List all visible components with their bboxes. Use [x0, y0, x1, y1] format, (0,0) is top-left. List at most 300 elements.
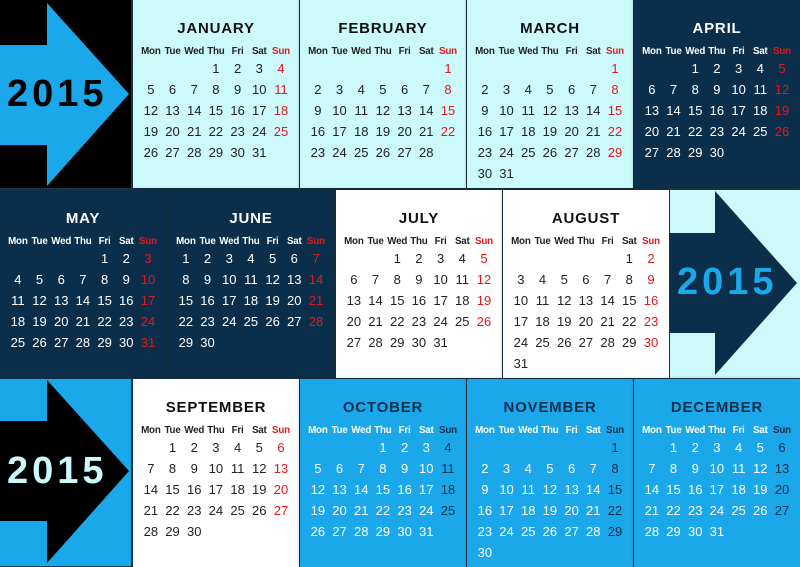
panel: january: 18 [274, 103, 288, 118]
panel: june: 28 [309, 314, 323, 329]
panel: august: 10 [514, 293, 528, 308]
panel: january: 27 [165, 145, 180, 160]
panel: december: 13 [775, 461, 789, 476]
panel: october: 3 [423, 440, 430, 455]
arrow block bottom-left [0, 379, 131, 566]
panel: august: 1 [626, 251, 633, 266]
panel: october: 4 [444, 440, 452, 455]
panel: september: 3 [212, 440, 220, 455]
panel: february: 22 [441, 124, 455, 139]
panel: april: Sun [773, 46, 791, 56]
panel: march: Sat [586, 46, 601, 56]
panel: april: 23 [710, 124, 724, 139]
panel: may: Sun [139, 236, 157, 246]
panel: november: Sun [606, 424, 624, 436]
panel: july: 23 [412, 314, 426, 329]
panel: february: 4 [358, 82, 365, 97]
panel: january: 17 [252, 103, 267, 118]
panel: december: Tue [665, 424, 682, 436]
panel: january: Thu [207, 46, 225, 56]
panel: may: Fri [99, 236, 111, 246]
panel: november: NOVEMBER [503, 399, 597, 416]
panel: december: 12 [753, 461, 768, 476]
panel: november: 9 [481, 482, 488, 497]
panel: august: 5 [561, 272, 568, 287]
panel: july: 3 [437, 251, 444, 266]
panel: november: 13 [564, 482, 579, 497]
panel: november: 16 [478, 503, 492, 518]
panel: may: 10 [141, 272, 155, 287]
panel: december: 26 [753, 503, 768, 518]
panel: april: 13 [645, 103, 659, 118]
panel: september: 21 [144, 503, 158, 518]
panel: august: 23 [644, 314, 658, 329]
panel: april: 22 [688, 124, 702, 139]
panel: june: JUNE [229, 210, 273, 227]
panel: february: 21 [419, 124, 434, 139]
panel: march: 29 [608, 145, 622, 160]
panel: may: 30 [119, 335, 134, 350]
panel: october: 14 [354, 482, 368, 497]
panel: december: 11 [732, 461, 745, 476]
panel: march: 2 [481, 82, 488, 97]
panel: june: Sun [307, 236, 325, 246]
panel: april: Thu [708, 46, 726, 56]
panel: september: 12 [252, 461, 267, 476]
panel: march: 17 [499, 124, 514, 139]
panel: november: 6 [568, 461, 575, 476]
panel: september: 1 [169, 440, 176, 455]
panel: august: 7 [604, 272, 611, 287]
panel: january: Wed [184, 46, 204, 56]
panel: january: 5 [147, 82, 154, 97]
panel: january: 25 [274, 124, 288, 139]
panel: october: 11 [441, 461, 455, 476]
panel: june: 5 [269, 251, 276, 266]
panel: march: Mon [475, 46, 495, 56]
panel: march: 12 [543, 103, 557, 118]
panel: january: Sun [272, 46, 290, 56]
panel: december: Fri [733, 424, 745, 436]
panel: march: 23 [478, 145, 492, 160]
panel: october: 1 [379, 440, 387, 455]
panel: august: 4 [539, 272, 546, 287]
panel: july: 28 [368, 335, 383, 350]
panel: october: 9 [401, 461, 408, 476]
panel: september: 26 [252, 503, 267, 518]
panel: november: 11 [521, 482, 535, 497]
panel: june: 11 [244, 272, 258, 287]
panel: july: 13 [347, 293, 361, 308]
panel: may: 12 [32, 293, 47, 308]
panel: june: 15 [179, 293, 193, 308]
panel: april: 11 [754, 82, 767, 97]
panel: june: Sat [287, 236, 302, 246]
panel: february: 8 [444, 82, 452, 97]
panel: june [168, 190, 334, 378]
panel: december: Thu [708, 424, 726, 436]
panel: august: 14 [600, 293, 615, 308]
panel: august: 19 [557, 314, 571, 329]
panel: april: 27 [645, 145, 659, 160]
panel: march: Wed [518, 46, 538, 56]
panel: august: 29 [622, 335, 637, 350]
panel: june: Tue [199, 236, 216, 246]
panel: december: 18 [731, 482, 746, 497]
panel: january: 4 [277, 61, 285, 76]
panel: february: 25 [354, 145, 368, 160]
panel: october: Tue [331, 424, 348, 436]
panel: december: Wed [685, 424, 705, 436]
year label: 2015 [677, 261, 778, 303]
panel: december: 6 [778, 440, 786, 455]
panel: september: 28 [144, 524, 158, 539]
panel: march: 16 [478, 124, 492, 139]
panel: august: 6 [582, 272, 590, 287]
panel: february: Sun [439, 46, 457, 56]
panel: february: 28 [419, 145, 434, 160]
panel: january: 20 [165, 124, 180, 139]
panel: february: Sat [419, 46, 434, 56]
panel: july: Sun [475, 236, 493, 246]
panel: january: JANUARY [177, 20, 255, 37]
panel: may: Thu [74, 236, 92, 246]
panel: june: Mon [176, 236, 196, 246]
panel: may: 20 [54, 314, 68, 329]
panel: september: 29 [165, 524, 180, 539]
panel: october: 10 [419, 461, 434, 476]
panel: january: Fri [232, 46, 244, 56]
panel: february: Fri [399, 46, 411, 56]
panel: february: 1 [444, 61, 452, 76]
panel: september: 22 [165, 503, 180, 518]
panel: march: 13 [564, 103, 579, 118]
panel: january: 30 [230, 145, 245, 160]
panel: march: 18 [521, 124, 535, 139]
panel: july: 24 [433, 314, 448, 329]
panel: october: 18 [441, 482, 455, 497]
panel: september: 6 [277, 440, 285, 455]
panel: december: Sat [753, 424, 768, 436]
panel: august: 12 [557, 293, 571, 308]
panel: june: 4 [247, 251, 255, 266]
panel: july: 17 [433, 293, 448, 308]
panel: july: 12 [477, 272, 491, 287]
panel: july: 25 [455, 314, 470, 329]
panel: june: 8 [182, 272, 189, 287]
panel: january: 15 [209, 103, 223, 118]
panel: february: 14 [419, 103, 434, 118]
panel: december: 17 [710, 482, 724, 497]
panel: may: 18 [11, 314, 25, 329]
panel: october: 15 [376, 482, 390, 497]
panel: march: 27 [564, 145, 579, 160]
panel: april: 19 [775, 103, 789, 118]
panel: may: 14 [76, 293, 90, 308]
panel: january: 13 [165, 103, 180, 118]
panel: july: 2 [415, 251, 423, 266]
panel: december [634, 379, 800, 567]
panel: may: 1 [101, 251, 108, 266]
panel: august: 8 [626, 272, 633, 287]
panel: december: 23 [688, 503, 702, 518]
panel: january: 16 [230, 103, 245, 118]
panel: august: AUGUST [552, 210, 620, 227]
panel: november: 1 [611, 440, 619, 455]
panel: december: 27 [775, 503, 789, 518]
panel: may: 26 [32, 335, 47, 350]
panel: august: Sun [642, 236, 660, 246]
panel: august: 27 [579, 335, 593, 350]
panel: november: Tue [498, 424, 515, 436]
panel: march: 30 [478, 166, 492, 181]
panel: september: 20 [274, 482, 288, 497]
panel: september: 19 [252, 482, 267, 497]
panel: november: 26 [543, 524, 557, 539]
panel: december: 31 [710, 524, 724, 539]
panel: july: 20 [347, 314, 361, 329]
panel: october: Fri [399, 424, 411, 436]
panel: april: 18 [753, 103, 768, 118]
panel: november: 21 [586, 503, 601, 518]
panel: march: 6 [568, 82, 575, 97]
panel: october: 26 [311, 524, 325, 539]
panel: february: 2 [314, 82, 321, 97]
panel: august: Mon [511, 236, 531, 246]
panel: may: 21 [76, 314, 90, 329]
panel: november: 7 [590, 461, 597, 476]
panel: june: 25 [244, 314, 258, 329]
panel: april: 21 [666, 124, 681, 139]
panel: november: 3 [503, 461, 510, 476]
panel: december: 16 [688, 482, 702, 497]
panel: february: 17 [332, 124, 347, 139]
panel: october: 24 [419, 503, 434, 518]
panel: september [133, 379, 299, 567]
panel: may: MAY [66, 210, 100, 227]
panel: april: 16 [710, 103, 724, 118]
panel: june: Thu [242, 236, 260, 246]
panel: july: 22 [390, 314, 404, 329]
panel: september: Sun [272, 424, 290, 436]
panel: august: 24 [514, 335, 528, 350]
panel: january: Sat [252, 46, 267, 56]
panel: december: 2 [692, 440, 699, 455]
panel: november: 25 [521, 524, 535, 539]
panel: january: 12 [144, 103, 158, 118]
panel: april: 25 [753, 124, 768, 139]
panel: january: 19 [144, 124, 158, 139]
panel: july: 4 [459, 251, 466, 266]
panel: march: 24 [499, 145, 514, 160]
panel: november: 5 [546, 461, 554, 476]
panel: december: 1 [670, 440, 677, 455]
panel: july: 21 [368, 314, 383, 329]
panel: february: Wed [351, 46, 371, 56]
panel: september: 9 [191, 461, 198, 476]
panel: october: 13 [332, 482, 347, 497]
panel: may: 15 [97, 293, 112, 308]
panel: october: 5 [314, 461, 321, 476]
panel: july: 6 [350, 272, 357, 287]
panel: february: 10 [332, 103, 347, 118]
panel: july: 1 [394, 251, 401, 266]
panel: october: 31 [419, 524, 434, 539]
panel: august: 11 [536, 293, 549, 308]
panel: november: Mon [475, 424, 495, 436]
panel: october: 2 [401, 440, 408, 455]
panel: october [300, 379, 466, 567]
panel: august: 13 [579, 293, 593, 308]
panel: january: 2 [234, 61, 241, 76]
panel: march [467, 0, 633, 188]
panel: october: 8 [379, 461, 387, 476]
panel: april: 3 [735, 61, 742, 76]
panel: november: 29 [608, 524, 622, 539]
panel: october: Sat [419, 424, 434, 436]
panel: april: 4 [757, 61, 764, 76]
panel: march: 26 [543, 145, 557, 160]
panel: december: 8 [670, 461, 677, 476]
panel: july: 8 [394, 272, 401, 287]
panel: september: 4 [234, 440, 241, 455]
panel: july: 31 [433, 335, 448, 350]
panel: may: 8 [101, 272, 108, 287]
panel: october: 17 [419, 482, 434, 497]
panel: august [503, 190, 669, 378]
panel: march: 15 [608, 103, 622, 118]
panel: november: 17 [499, 503, 514, 518]
panel: february: 6 [401, 82, 408, 97]
panel: october: Thu [374, 424, 392, 436]
panel: july: 15 [390, 293, 404, 308]
panel: february: 26 [376, 145, 390, 160]
panel: august: 17 [514, 314, 528, 329]
panel: february: 13 [397, 103, 412, 118]
panel: february: 7 [423, 82, 430, 97]
panel: december: 30 [688, 524, 702, 539]
panel: september: 18 [230, 482, 245, 497]
panel: march: Thu [541, 46, 559, 56]
icon: blue arrow [0, 3, 129, 186]
panel: may: 7 [79, 272, 87, 287]
panel: august: 20 [579, 314, 593, 329]
panel: january: 21 [187, 124, 201, 139]
panel: march: 14 [586, 103, 601, 118]
panel: june: 20 [287, 293, 302, 308]
panel: february: 5 [379, 82, 387, 97]
panel: october: 6 [336, 461, 343, 476]
icon: black arrow [0, 380, 129, 563]
panel: april: 24 [731, 124, 746, 139]
panel: may [0, 190, 166, 378]
panel: august: Sat [622, 236, 637, 246]
panel: june: 19 [265, 293, 280, 308]
panel: august: 15 [622, 293, 637, 308]
panel: september: Sat [252, 424, 267, 436]
panel: may: Wed [51, 236, 71, 246]
panel: december: 7 [648, 461, 655, 476]
panel: january: 22 [209, 124, 223, 139]
panel: january: 28 [187, 145, 201, 160]
panel: march: 4 [525, 82, 532, 97]
panel: august: 2 [647, 251, 655, 266]
panel: march: 28 [586, 145, 601, 160]
panel: july: Wed [387, 236, 407, 246]
panel: january: 10 [252, 82, 267, 97]
panel: may: 25 [11, 335, 25, 350]
panel: september: 11 [231, 461, 244, 476]
panel: july: 16 [412, 293, 426, 308]
panel: september: 5 [256, 440, 263, 455]
panel: july: 30 [412, 335, 426, 350]
panel: august: 18 [535, 314, 550, 329]
panel: january: 26 [144, 145, 158, 160]
panel: october: 22 [376, 503, 390, 518]
panel: july: 14 [368, 293, 383, 308]
panel: june: 12 [265, 272, 280, 287]
panel: march: 19 [543, 124, 557, 139]
panel: january: 7 [191, 82, 198, 97]
panel: december: 3 [713, 440, 721, 455]
panel: april: 30 [710, 145, 724, 160]
panel: june: Fri [267, 236, 279, 246]
panel: april: 9 [713, 82, 721, 97]
panel: june: 6 [291, 251, 298, 266]
panel: june: 13 [287, 272, 302, 287]
panel: may: 2 [123, 251, 130, 266]
panel: february: 24 [332, 145, 347, 160]
panel: october: Wed [351, 424, 371, 436]
panel: may: 24 [141, 314, 155, 329]
panel: march: 1 [611, 61, 619, 76]
panel: january: 1 [212, 61, 220, 76]
panel: july: Sat [455, 236, 470, 246]
panel: october: 7 [358, 461, 365, 476]
panel: july: Tue [367, 236, 384, 246]
panel: march: MARCH [520, 20, 580, 37]
panel: december: Sun [773, 424, 791, 436]
panel: may: 9 [123, 272, 130, 287]
panel: april: 1 [692, 61, 699, 76]
panel: june: 30 [200, 335, 215, 350]
panel: september: Thu [207, 424, 225, 436]
panel: april: 17 [731, 103, 746, 118]
panel: april: APRIL [692, 20, 742, 37]
panel: september: 25 [230, 503, 245, 518]
panel: july: 19 [477, 293, 491, 308]
panel: july: 7 [372, 272, 379, 287]
panel: june: 2 [204, 251, 211, 266]
panel: december: 15 [666, 482, 681, 497]
panel: may: 23 [119, 314, 134, 329]
panel: may: 17 [141, 293, 155, 308]
panel: october: 16 [397, 482, 412, 497]
panel: december: 14 [645, 482, 659, 497]
panel: july: JULY [399, 210, 439, 227]
panel: august: 3 [517, 272, 524, 287]
panel: september: 16 [187, 482, 201, 497]
panel: november: 22 [608, 503, 622, 518]
panel: november: 19 [543, 503, 557, 518]
panel: july: 18 [455, 293, 470, 308]
panel: november: 28 [586, 524, 601, 539]
panel: may: 5 [36, 272, 43, 287]
panel: november: Sat [586, 424, 601, 436]
panel: november: 8 [611, 461, 619, 476]
panel: september: Tue [164, 424, 181, 436]
panel: march: 3 [503, 82, 510, 97]
